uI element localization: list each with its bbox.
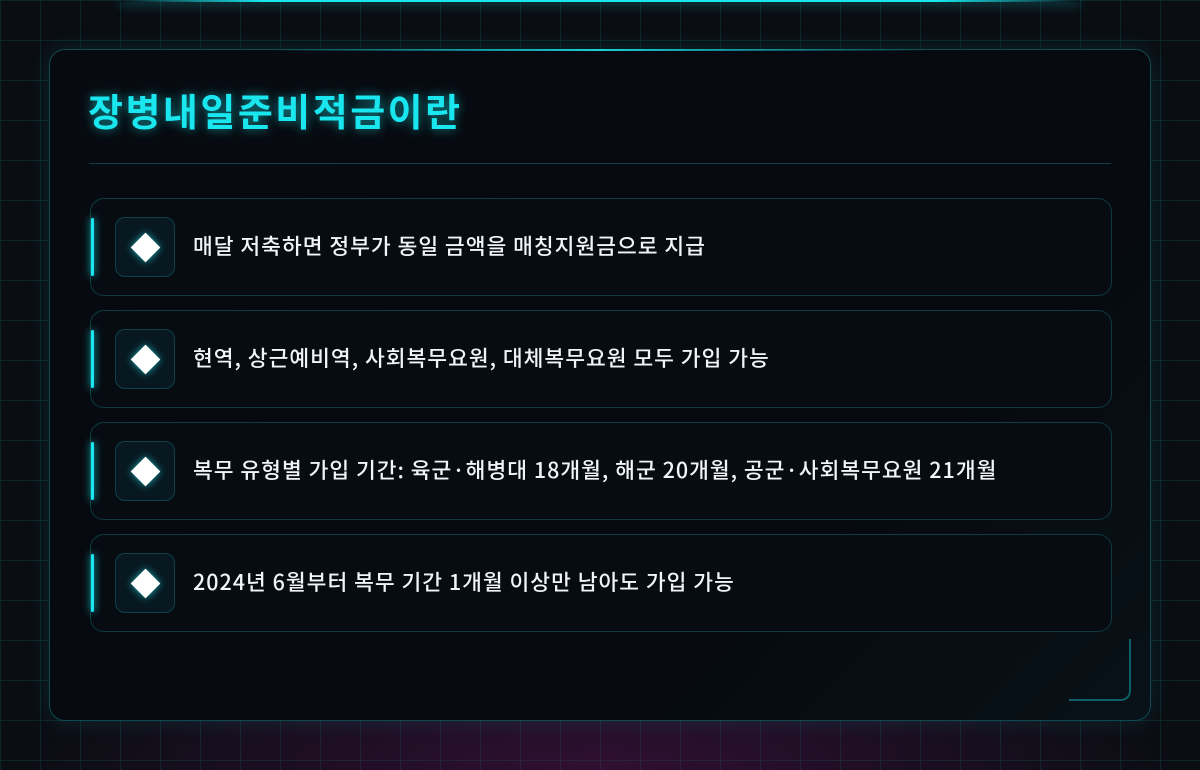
- item 4: [90, 534, 1112, 632]
- item 2: [90, 310, 1112, 408]
- text 1: 매달 저축하면 정부가 동일 금액을 매칭지원금으로 지급: [193, 230, 706, 261]
- corner bracket: [1069, 639, 1131, 701]
- icon: diamond: [115, 553, 175, 613]
- icon: diamond: [115, 329, 175, 389]
- text 3: 복무 유형별 가입 기간: 육군·해병대 18개월, 해군 20개월, 공군·사회복무요원 21개월: [193, 454, 997, 485]
- text 2: 현역, 상근예비역, 사회복무요원, 대체복무요원 모두 가입 가능: [193, 342, 770, 373]
- text 4: 2024년 6월부터 복무 기간 1개월 이상만 남아도 가입 가능: [193, 566, 735, 597]
- icon: diamond: [115, 441, 175, 501]
- item 1: [90, 198, 1112, 296]
- title: 장병내일준비적금이란: [88, 82, 463, 137]
- icon: diamond: [115, 217, 175, 277]
- item 3: [90, 422, 1112, 520]
